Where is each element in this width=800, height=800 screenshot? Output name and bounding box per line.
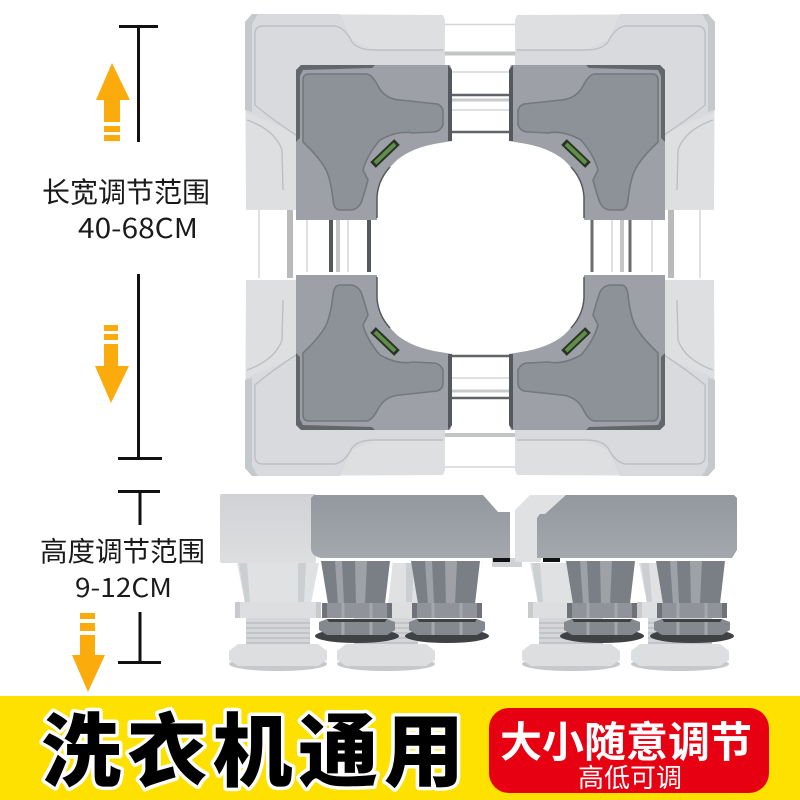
side view: light feet left: [229, 563, 435, 671]
side view: right light block: [515, 495, 572, 562]
side view: right dark block: [537, 495, 737, 558]
label: width and length range: [42, 171, 210, 246]
light outer corner: top left: [245, 14, 445, 210]
light outer corner: bottom right: [515, 280, 715, 476]
yellow banner: [0, 688, 800, 800]
red badge: [489, 708, 769, 795]
side view: light feet right: [522, 563, 729, 671]
dimension line: height lower: [118, 612, 161, 663]
side view: dark feet: [315, 561, 734, 643]
dark inner corner: top right: [509, 65, 665, 220]
adjustable rails: bottom side: [445, 356, 515, 467]
side view: left dark block: [311, 495, 510, 558]
arrow: down: [95, 325, 129, 403]
label: width and length range: 长宽调节范围: [42, 171, 210, 211]
arrow: height down: [72, 613, 105, 692]
dimension line: height upper: [118, 491, 160, 525]
arrow: up: [96, 63, 130, 141]
dimension line: width lower: [118, 274, 162, 458]
adjustable rails: right side: [592, 210, 700, 278]
label: height range: 高度调节范围: [40, 529, 205, 569]
badge main text: 大小随意调节: [500, 709, 752, 770]
light outer corner: top right: [515, 14, 715, 210]
dark inner corner: bottom right: [509, 275, 665, 430]
badge sub text: 高低可调: [578, 758, 682, 795]
adjustable rails: left side: [259, 210, 369, 278]
label: height range: 9-12CM: [75, 568, 172, 605]
dimension line: width upper: [119, 26, 158, 142]
label: width and length range: 40-68CM: [78, 207, 198, 246]
dark inner corner: bottom left: [296, 275, 452, 430]
label: height range: [40, 529, 205, 605]
side view: left light block: [220, 494, 316, 563]
light outer corner: bottom left: [245, 280, 445, 476]
dark inner corner: top left: [296, 65, 452, 220]
adjustable rails: top side: [443, 24, 515, 132]
side view: connector rods: [492, 558, 560, 567]
